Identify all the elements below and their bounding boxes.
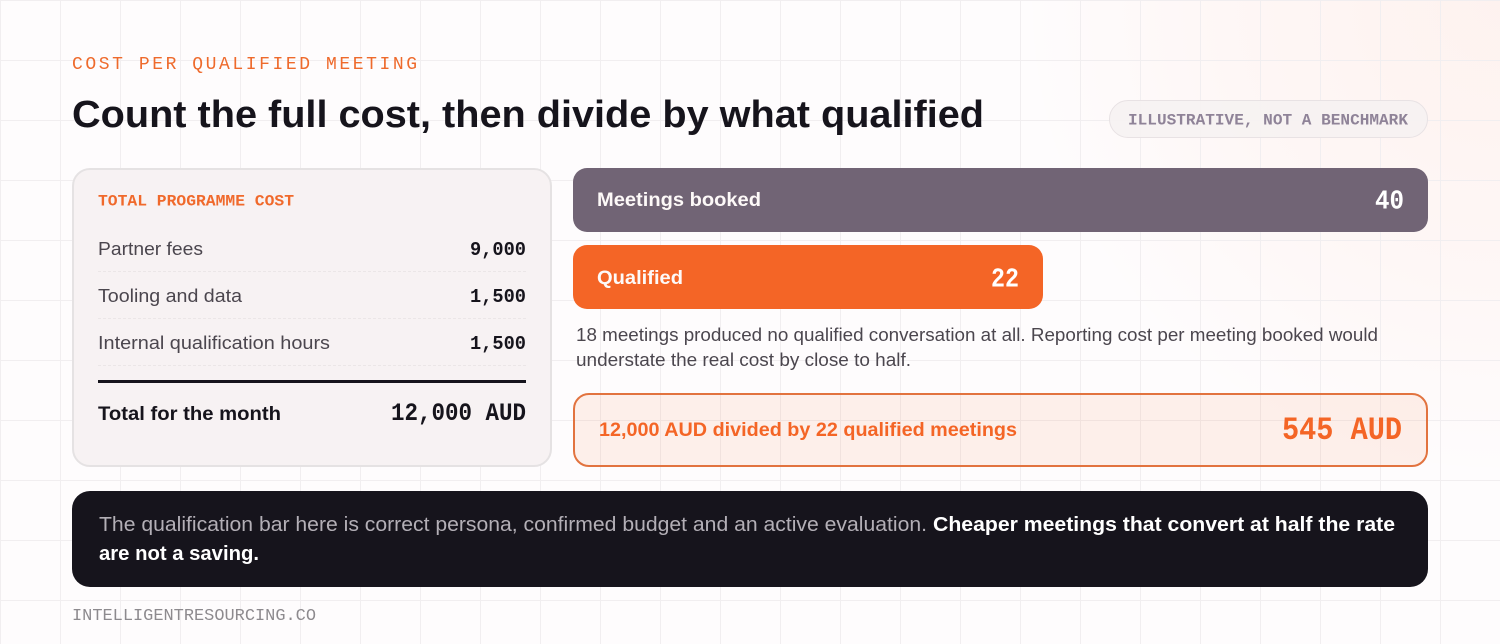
bar: qualified: 22 (991, 266, 1019, 296)
callout: cost per qualified meeting result (574, 394, 1427, 466)
row: tooling and data: Tooling and data (98, 285, 243, 306)
bar: meetings booked: 40 (1375, 188, 1404, 218)
total row (98, 380, 526, 428)
callout: cost per qualified meeting result: 545 AUD (1282, 412, 1402, 449)
total row: 12,000 AUD (391, 399, 526, 428)
takeaway banner (72, 491, 1428, 587)
bar: qualified (573, 245, 1043, 309)
bar: meetings booked (573, 168, 1428, 232)
row: partner fees (98, 238, 526, 272)
row: internal qualification hours: 1,500 (470, 333, 526, 355)
bar: meetings booked: Meetings booked (597, 190, 761, 211)
explanatory text: 18 meetings produced no qualified conversation at all. Reporting cost per meeting booked would (576, 325, 1378, 345)
total row: Total for the month (98, 403, 281, 425)
row: internal qualification hours (98, 332, 526, 366)
eyebrow: COST PER QUALIFIED MEETING (72, 55, 417, 75)
badge: illustrative (1110, 100, 1428, 138)
row: internal qualification hours: Internal qualification hours (98, 332, 330, 353)
bar: qualified: Qualified (597, 268, 683, 289)
badge: illustrative: ILLUSTRATIVE, NOT A BENCHMARK (1128, 112, 1408, 130)
row: partner fees: Partner fees (98, 238, 203, 259)
row: partner fees: 9,000 (470, 239, 526, 261)
takeaway banner: Cheaper meetings that convert at half the rate (933, 514, 1395, 536)
callout: cost per qualified meeting result: 12,000 AUD divided by 22 qualified meetings (599, 419, 1017, 441)
explanatory text: understate the real cost by close to half. (576, 350, 911, 370)
row: tooling and data: 1,500 (470, 286, 526, 308)
title: Count the full cost, then divide by what qualified (72, 94, 984, 136)
panel heading: TOTAL PROGRAMME COST (98, 192, 294, 210)
takeaway banner: are not a saving. (99, 543, 259, 565)
takeaway banner: The qualification bar here is correct persona, confirmed budget and an active evaluation. (99, 514, 927, 536)
explanatory text (576, 325, 1378, 370)
footer: INTELLIGENTRESOURCING.CO (72, 607, 316, 626)
row: tooling and data (98, 285, 526, 318)
panel: total programme cost (73, 169, 551, 466)
